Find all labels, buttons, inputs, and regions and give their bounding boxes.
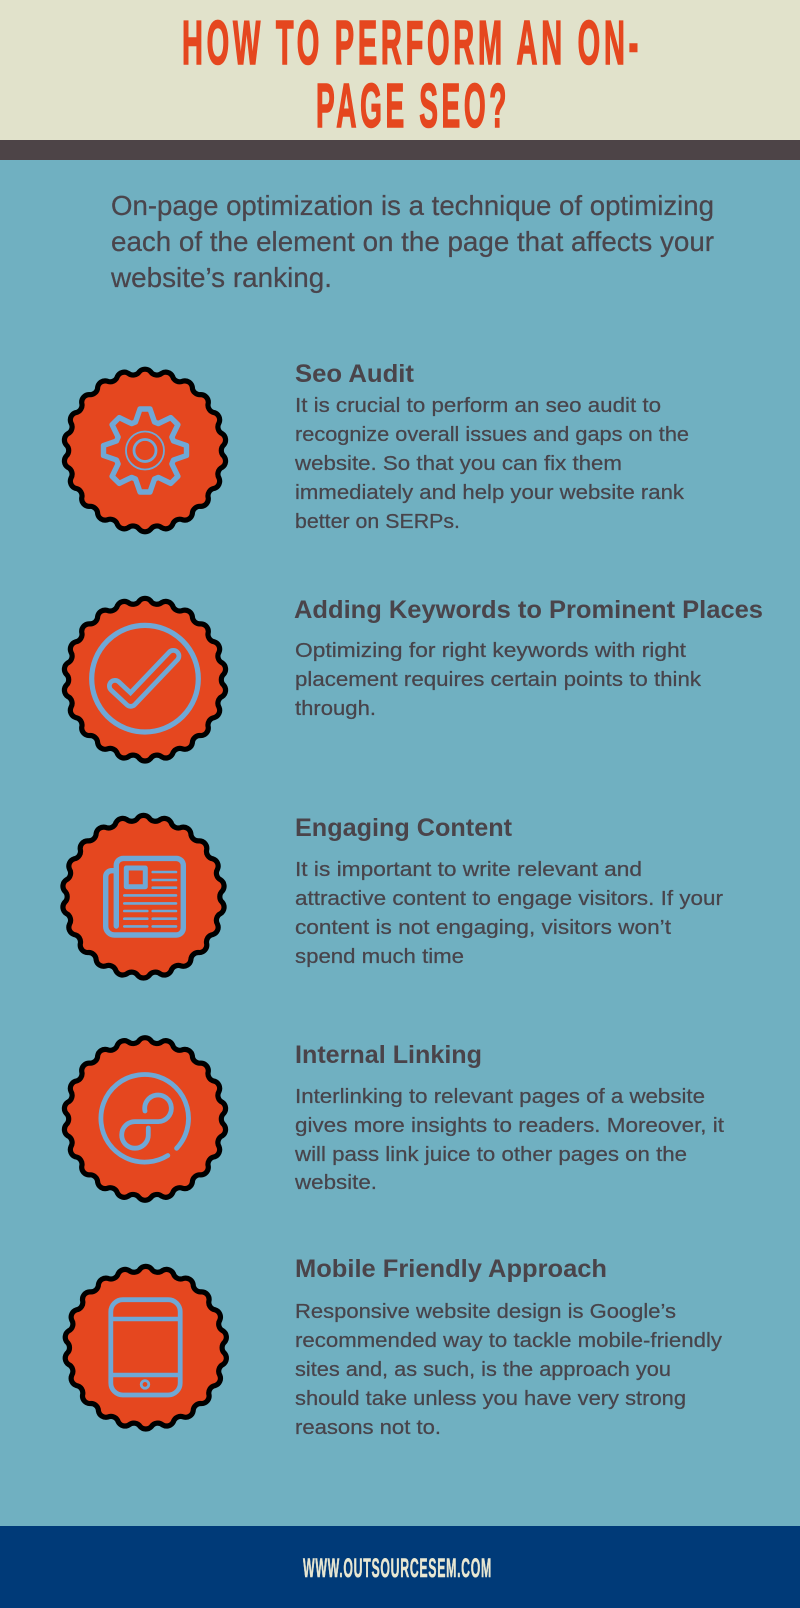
icon: tablet badge <box>65 1266 226 1429</box>
text block: seo audit <box>294 394 689 533</box>
text block: keywords: through. <box>295 697 376 720</box>
intro text: website’s ranking. <box>110 262 332 293</box>
text block: internal linking: will pass link juice to other pages on the <box>294 1143 687 1166</box>
text block: engaging content: spend much time <box>295 945 464 968</box>
text block: engaging content <box>295 858 723 968</box>
text block: seo audit: immediately and help your website rank <box>295 481 685 504</box>
panel: keywords <box>64 596 763 761</box>
text block: mobile friendly: reasons not to. <box>295 1416 441 1439</box>
heading: keywords: Adding Keywords to Prominent Places <box>294 596 763 624</box>
title: PAGE SEO? <box>316 72 510 141</box>
panel: seo audit <box>64 360 689 533</box>
text block: seo audit: website. So that you can fix them <box>294 452 622 475</box>
icon: newspaper badge <box>63 815 224 978</box>
icon: check badge <box>64 598 226 761</box>
text block: keywords <box>295 639 702 720</box>
text block: mobile friendly: Responsive website design is Google’s <box>295 1300 676 1323</box>
heading: engaging content: Engaging Content <box>295 814 513 842</box>
footer panel <box>0 1526 800 1608</box>
heading: internal linking: Internal Linking <box>295 1041 482 1069</box>
footer panel: WWW.OUTSOURCESEM.COM <box>303 1553 492 1583</box>
intro text <box>110 190 714 293</box>
icon: link badge <box>64 1038 226 1200</box>
text block: mobile friendly <box>295 1300 723 1439</box>
text block: engaging content: attractive content to engage visitors. If your <box>295 887 723 910</box>
dark divider band <box>0 140 800 160</box>
icon: gear badge <box>64 369 226 532</box>
text block: seo audit: It is crucial to perform an seo audit to <box>295 394 661 417</box>
intro text: each of the element on the page that affects your <box>111 226 714 257</box>
text block: mobile friendly: sites and, as such, is the approach you <box>295 1358 671 1381</box>
text block: mobile friendly: should take unless you have very strong <box>295 1387 686 1410</box>
panel: engaging content <box>63 814 723 978</box>
text block: engaging content: content is not engaging, visitors won’t <box>295 916 671 939</box>
text block: seo audit: better on SERPs. <box>295 510 460 533</box>
heading: seo audit: Seo Audit <box>295 360 415 388</box>
text block: mobile friendly: recommended way to tackle mobile-friendly <box>295 1329 723 1352</box>
text block: keywords: Optimizing for right keywords with right <box>295 639 686 662</box>
text block: internal linking: Interlinking to relevant pages of a website <box>295 1085 705 1108</box>
text block: internal linking <box>294 1085 724 1194</box>
title <box>182 9 642 141</box>
text block: seo audit: recognize overall issues and gaps on the <box>295 423 689 446</box>
header panel <box>0 0 800 141</box>
panel: internal linking <box>64 1038 724 1200</box>
text block: internal linking: website. <box>294 1171 377 1194</box>
text block: internal linking: gives more insights to readers. Moreover, it <box>295 1114 724 1137</box>
intro text: On-page optimization is a technique of optimizing <box>111 190 714 221</box>
text block: keywords: placement requires certain points to think <box>295 668 702 691</box>
heading: mobile friendly: Mobile Friendly Approach <box>295 1255 607 1283</box>
text block: engaging content: It is important to write relevant and <box>295 858 642 881</box>
panel: mobile friendly <box>65 1255 723 1439</box>
